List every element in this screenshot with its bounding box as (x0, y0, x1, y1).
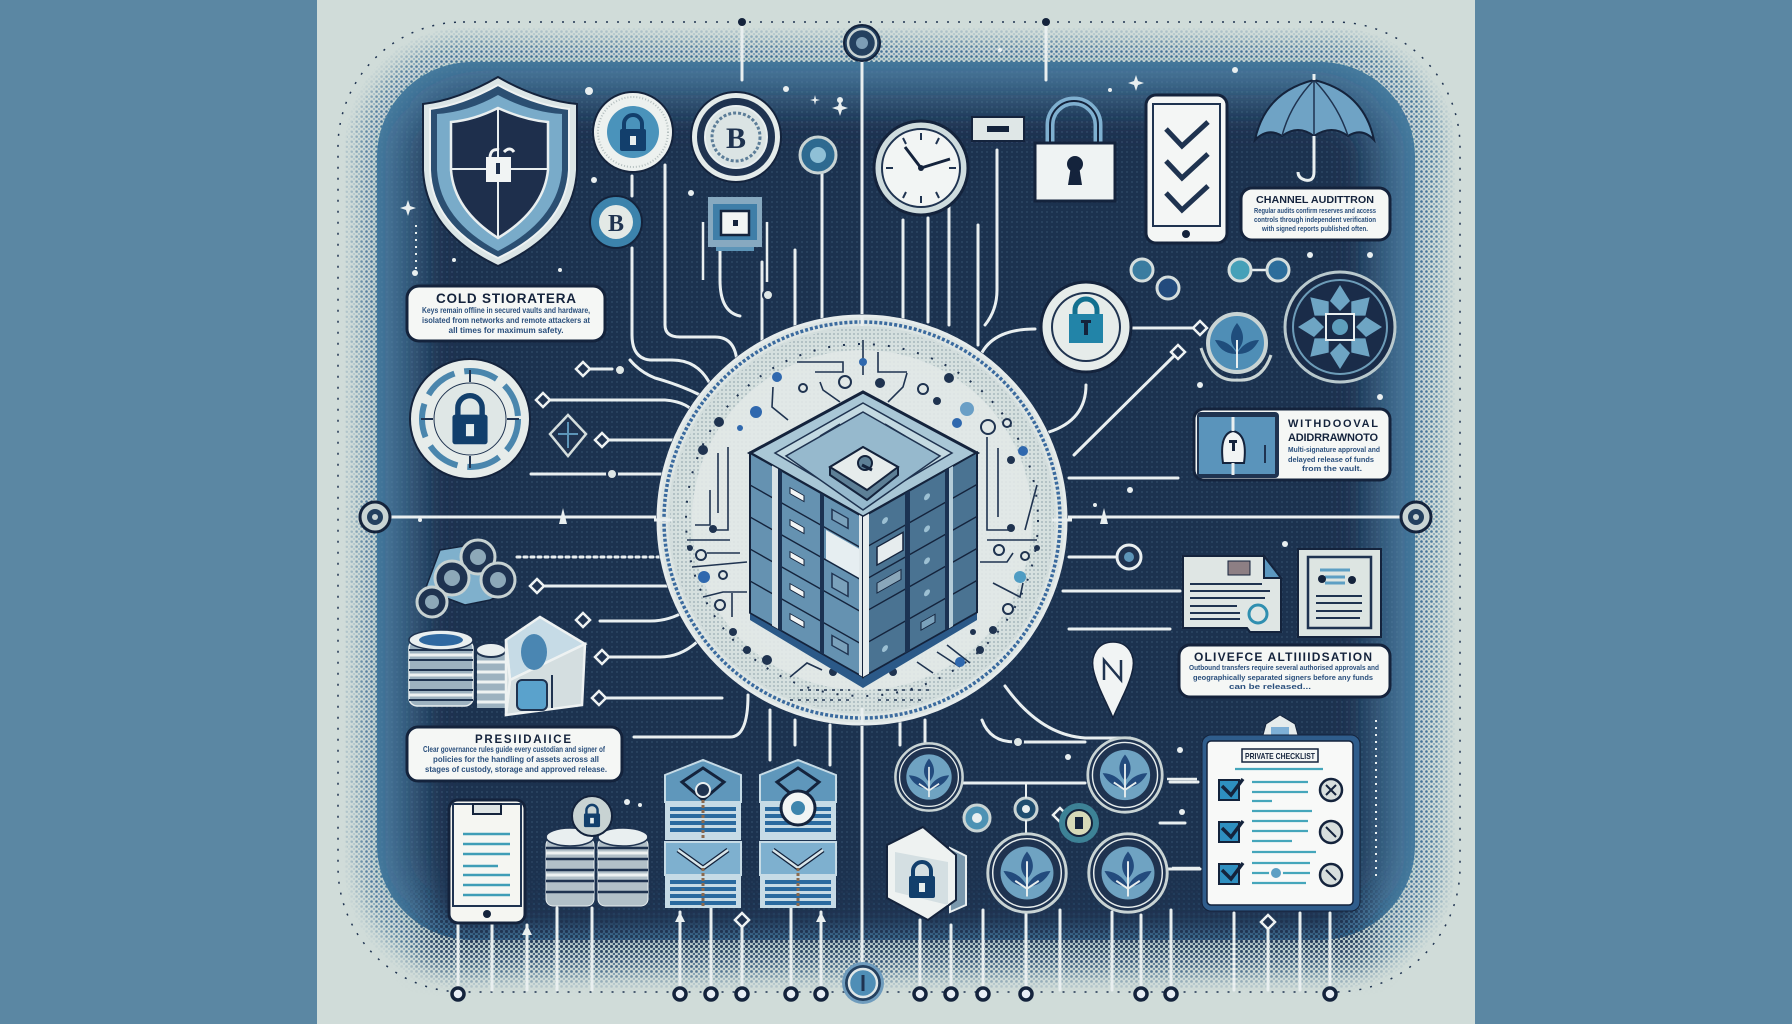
lock block (830, 447, 898, 500)
icon: tablet (449, 800, 525, 923)
icon: leaf medallions (988, 738, 1200, 912)
central circle (654, 314, 1072, 726)
callout: withdrawal: delayed release of funds (1288, 455, 1374, 464)
icon: chip (703, 197, 767, 282)
left axis node (360, 502, 390, 532)
top connector medallion (844, 25, 880, 61)
icon: location pin (1093, 642, 1133, 718)
icon: lock coin (593, 92, 673, 172)
icon: diamond badge (550, 415, 586, 456)
callout: withdrawal (1194, 409, 1390, 480)
icon: leaf badge with open ring (1201, 314, 1271, 380)
icon: shield (423, 77, 577, 266)
cube vault (750, 392, 977, 688)
callout: cold storage: isolated from networks and remote attackers at (422, 316, 590, 325)
callout: cold storage (407, 286, 605, 341)
callout: oliveforce authorization: OLIVEFCE ALTIIIIDSATION (1194, 650, 1372, 664)
icon: envelope stack left (665, 760, 741, 908)
callout: presidance: policies for the handling of assets across all (433, 755, 599, 764)
callout: channel audit: controls through independent verification (1254, 215, 1376, 224)
callout: withdrawal: WITHDOOVAL (1288, 418, 1378, 430)
right face (863, 452, 977, 677)
icon: coin stacks with lock (546, 796, 648, 906)
callout: cold storage: COLD STIORATERA (436, 291, 576, 306)
axis arrow ticks (522, 508, 1108, 935)
icon: leaf medallion top centre (895, 743, 963, 811)
icon: small badge (800, 137, 836, 173)
callout: withdrawal: from the vault. (1302, 464, 1362, 473)
callout: presidance (407, 727, 622, 781)
connector nodes (452, 18, 1336, 1000)
icon: smartphone with checks (1146, 95, 1227, 243)
icon: padlock medallion (1041, 282, 1131, 372)
halftone panel backdrop (338, 22, 1460, 1010)
callout: presidance: Clear governance rules guide every custodian and signer of (423, 745, 605, 754)
icon: coin cluster (417, 540, 515, 617)
callout: cold storage: Keys remain offline in secured vaults and hardware, (422, 306, 590, 315)
icon: envelope stack right (760, 760, 836, 908)
callout: oliveforce authorization (1179, 645, 1390, 697)
icon: documents (1183, 549, 1381, 637)
left face (750, 453, 864, 678)
icon: padlock (1035, 101, 1115, 201)
callout: withdrawal: ADIDRRAWNOTO (1288, 432, 1378, 444)
callout: channel audit (1241, 188, 1390, 240)
icon: wallet with lock (887, 827, 966, 920)
callout: oliveforce authorization: can be released... (1229, 682, 1311, 691)
icon: clock (874, 121, 968, 215)
central light panel (317, 0, 1475, 1024)
callout: presidance: stages of custody, storage and approved release. (425, 765, 607, 774)
callout: oliveforce authorization: Outbound transfers require several authorised approvals and (1189, 663, 1379, 672)
icon: coin stacks and safe box (409, 617, 585, 715)
icon: mandala seal (1285, 272, 1395, 382)
connector lines (390, 26, 1400, 990)
icon: bitcoin coin: B (726, 122, 746, 155)
callout: channel audit: with signed reports published often. (1261, 224, 1368, 233)
icon: small rectangle tag (972, 117, 1024, 141)
bottom connector medallion (842, 962, 884, 1004)
icon: umbrella (1255, 74, 1374, 180)
callout: oliveforce authorization: geographically separated signers before any funds (1193, 673, 1373, 682)
icon: small coin (590, 196, 642, 248)
icon: checklist clipboard (1202, 715, 1360, 911)
icon: bitcoin coin (691, 92, 781, 182)
icon: checklist clipboard: PRIVATE CHECKLIST (1245, 751, 1316, 761)
callout: channel audit: CHANNEL AUDITTRON (1256, 194, 1374, 206)
icon: lock dial (410, 359, 530, 479)
right axis node (1401, 502, 1431, 532)
callout: withdrawal: Multi-signature approval and (1288, 445, 1380, 454)
icon: small link badges (1131, 259, 1289, 299)
sparkles (400, 48, 1383, 880)
icon: small round badges (964, 783, 1099, 843)
callout: cold storage: all times for maximum safety. (448, 326, 564, 335)
callout: presidance: PRESIIDAIICE (475, 734, 571, 746)
callout: channel audit: Regular audits confirm reserves and access (1254, 206, 1376, 215)
icon: small coin: B (608, 211, 624, 237)
circuit traces (687, 340, 1037, 700)
